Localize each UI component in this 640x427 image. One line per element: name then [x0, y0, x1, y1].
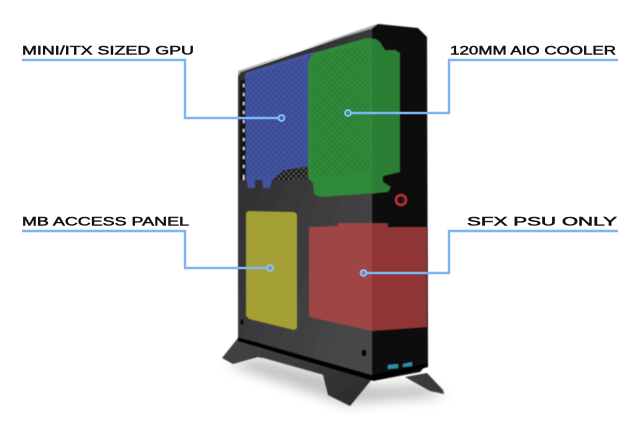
usb ports: [388, 362, 412, 369]
highlight: psu: [309, 223, 427, 331]
right foot: [405, 373, 444, 394]
vent column: [240, 80, 246, 180]
callout: mb access panel: MB ACCESS PANEL: [22, 216, 190, 228]
callout: sfx psu only: SFX PSU ONLY: [467, 216, 618, 228]
highlight: gpu: [245, 52, 313, 188]
pc case: [238, 24, 428, 381]
base strip: [238, 337, 428, 381]
callout: mini/itx sized gpu: MINI/ITX SIZED GPU: [22, 46, 194, 58]
floor shadow: [226, 358, 445, 404]
top edge highlight: [238, 24, 377, 76]
foot highlight: [262, 358, 322, 375]
case holes: [240, 319, 366, 356]
dark perforated strip: [270, 164, 310, 180]
stand feet: [222, 338, 444, 406]
highlight: mb access panel: [246, 211, 297, 330]
callout: mini/itx sized gpu: [22, 46, 284, 121]
callout: 120mm aio cooler: 120MM AIO COOLER: [450, 46, 616, 58]
front panel: [372, 24, 428, 380]
callout: mb access panel: [22, 216, 273, 271]
side panel: [238, 25, 378, 380]
left foot: [222, 338, 373, 406]
vent slots: [243, 84, 244, 180]
power button: [396, 195, 406, 205]
callout: sfx psu only: [360, 216, 618, 276]
highlight: cooler: [308, 38, 400, 197]
callout: 120mm aio cooler: [345, 46, 618, 116]
